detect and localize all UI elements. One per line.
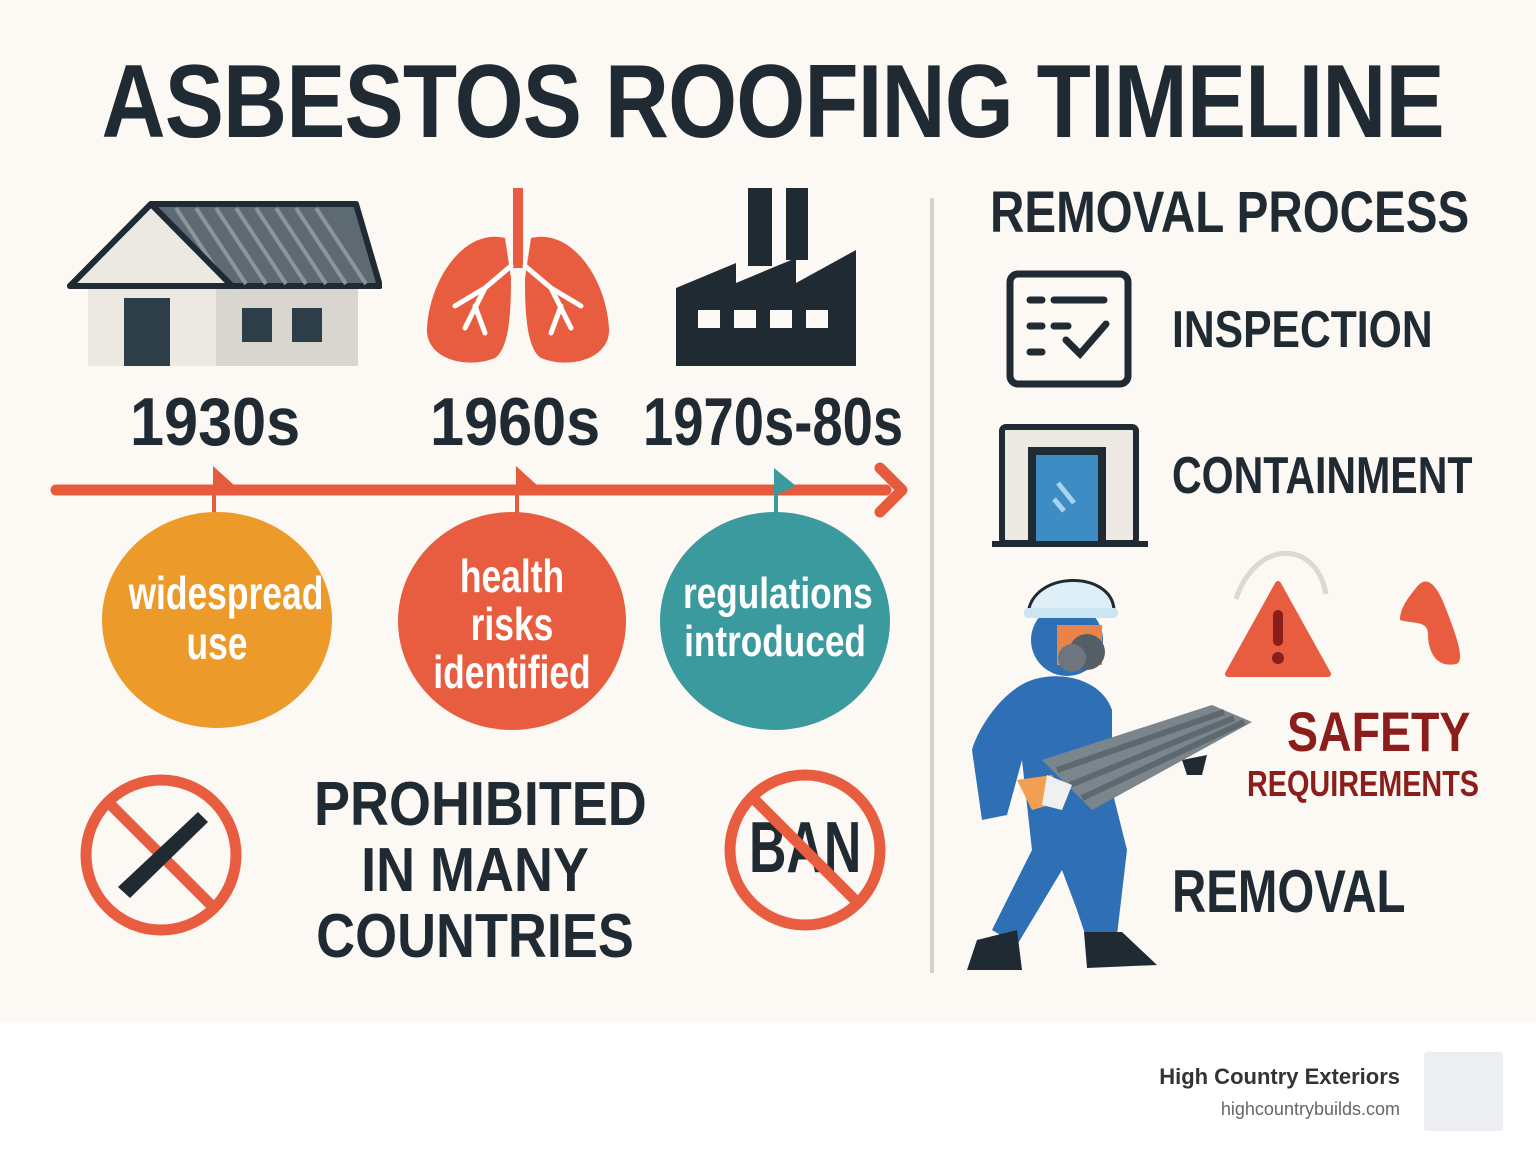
- icon: worker carrying sheet: [967, 579, 1252, 970]
- text: containment: CONTAINMENT: [1172, 447, 1472, 505]
- heading: removal process: REMOVAL PROCESS: [990, 180, 1469, 245]
- text: prohibited in many countries: PROHIBITED: [314, 770, 647, 839]
- circle: health risks identified: identified: [433, 646, 591, 698]
- icon: prohibited tool: [80, 774, 242, 936]
- text: inspection: INSPECTION: [1172, 301, 1433, 359]
- icon: ban: [724, 770, 886, 930]
- circle: health risks identified: health: [460, 550, 564, 602]
- footer brand: highcountrybuilds.com: [1221, 1099, 1400, 1119]
- icon: inspection checklist: [1006, 270, 1132, 388]
- circle: regulations introduced: introduced: [684, 617, 866, 666]
- text: 1930s: [130, 384, 300, 460]
- circle: health risks identified: [398, 512, 626, 730]
- text: prohibited in many countries: [314, 770, 647, 971]
- icon: house: [67, 201, 382, 366]
- footer brand: [1159, 1052, 1503, 1131]
- footer brand: High Country Exteriors: [1159, 1064, 1400, 1089]
- text: prohibited in many countries: COUNTRIES: [316, 902, 634, 971]
- circle: widespread use: [102, 512, 332, 728]
- circle: widespread use: use: [186, 617, 248, 669]
- title: ASBESTOS ROOFING TIMELINE: [101, 44, 1444, 160]
- text: 1960s: [430, 384, 600, 460]
- circle: widespread use: widespread: [128, 567, 323, 619]
- year labels: [130, 384, 903, 460]
- circle: regulations introduced: regulations: [683, 569, 873, 618]
- text: safety requirements: SAFETY: [1287, 700, 1470, 763]
- icon: ban: BAN: [749, 808, 861, 888]
- icon: containment: [992, 424, 1148, 547]
- text: 1970s-80s: [643, 384, 903, 460]
- icon: lungs: [426, 188, 610, 363]
- arrow: timeline: [50, 462, 908, 518]
- text: prohibited in many countries: IN MANY: [361, 836, 589, 905]
- circle: health risks identified: risks: [471, 598, 553, 650]
- icon: factory: [676, 188, 856, 366]
- icon: warning: [1225, 550, 1460, 677]
- text: safety requirements: REQUIREMENTS: [1247, 763, 1479, 804]
- circle: regulations introduced: [660, 512, 890, 730]
- text: removal: REMOVAL: [1172, 858, 1405, 925]
- text: safety requirements: [1247, 700, 1479, 804]
